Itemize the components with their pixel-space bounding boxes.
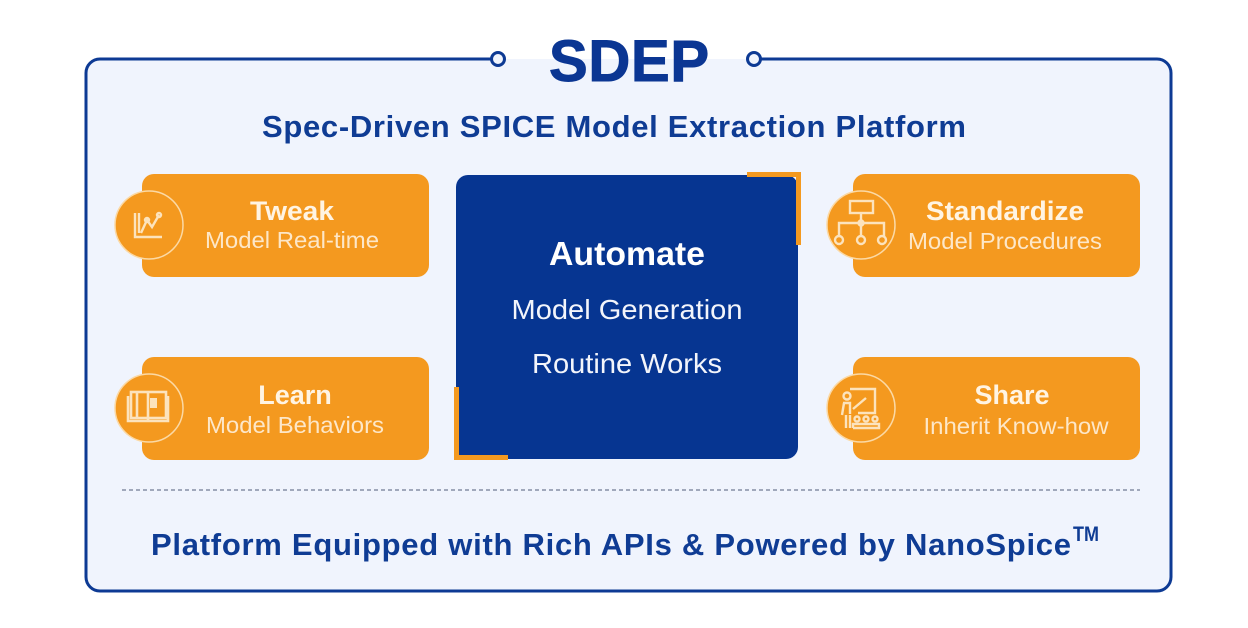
icon: line chart (115, 191, 183, 259)
icon: teacher at board (827, 374, 895, 442)
card: Tweak: Model Real-time (205, 227, 379, 253)
card: Standardize (827, 174, 1140, 277)
card: Learn (115, 357, 429, 460)
panel: Automate: Automate (549, 235, 705, 272)
panel: Automate: Model Generation (512, 294, 742, 325)
corner accent: bottom left (456, 387, 508, 458)
card: Tweak: Tweak (250, 196, 335, 226)
title: SDEP (549, 29, 709, 94)
card: Standardize: Standardize (926, 196, 1084, 226)
card: Share (827, 357, 1140, 460)
subtitle: Spec-Driven SPICE Model Extraction Platform (262, 109, 966, 144)
card: Share: Inherit Know-how (924, 413, 1109, 439)
panel: platform frame (86, 40, 1171, 591)
icon: open book (115, 374, 183, 442)
icon: flow chart (827, 191, 895, 259)
card: Share: Share (974, 380, 1050, 410)
trademark: TM (1073, 523, 1099, 546)
panel: Automate: Routine Works (532, 348, 722, 379)
card: Tweak (115, 174, 429, 277)
card: Learn: Learn (258, 380, 332, 410)
card: Standardize: Model Procedures (908, 228, 1102, 254)
corner accent: top right (747, 174, 798, 245)
panel: Automate (456, 174, 798, 459)
card: Learn: Model Behaviors (206, 412, 384, 438)
footer text: Platform Equipped with Rich APIs & Powered by NanoSpice (151, 527, 1071, 562)
